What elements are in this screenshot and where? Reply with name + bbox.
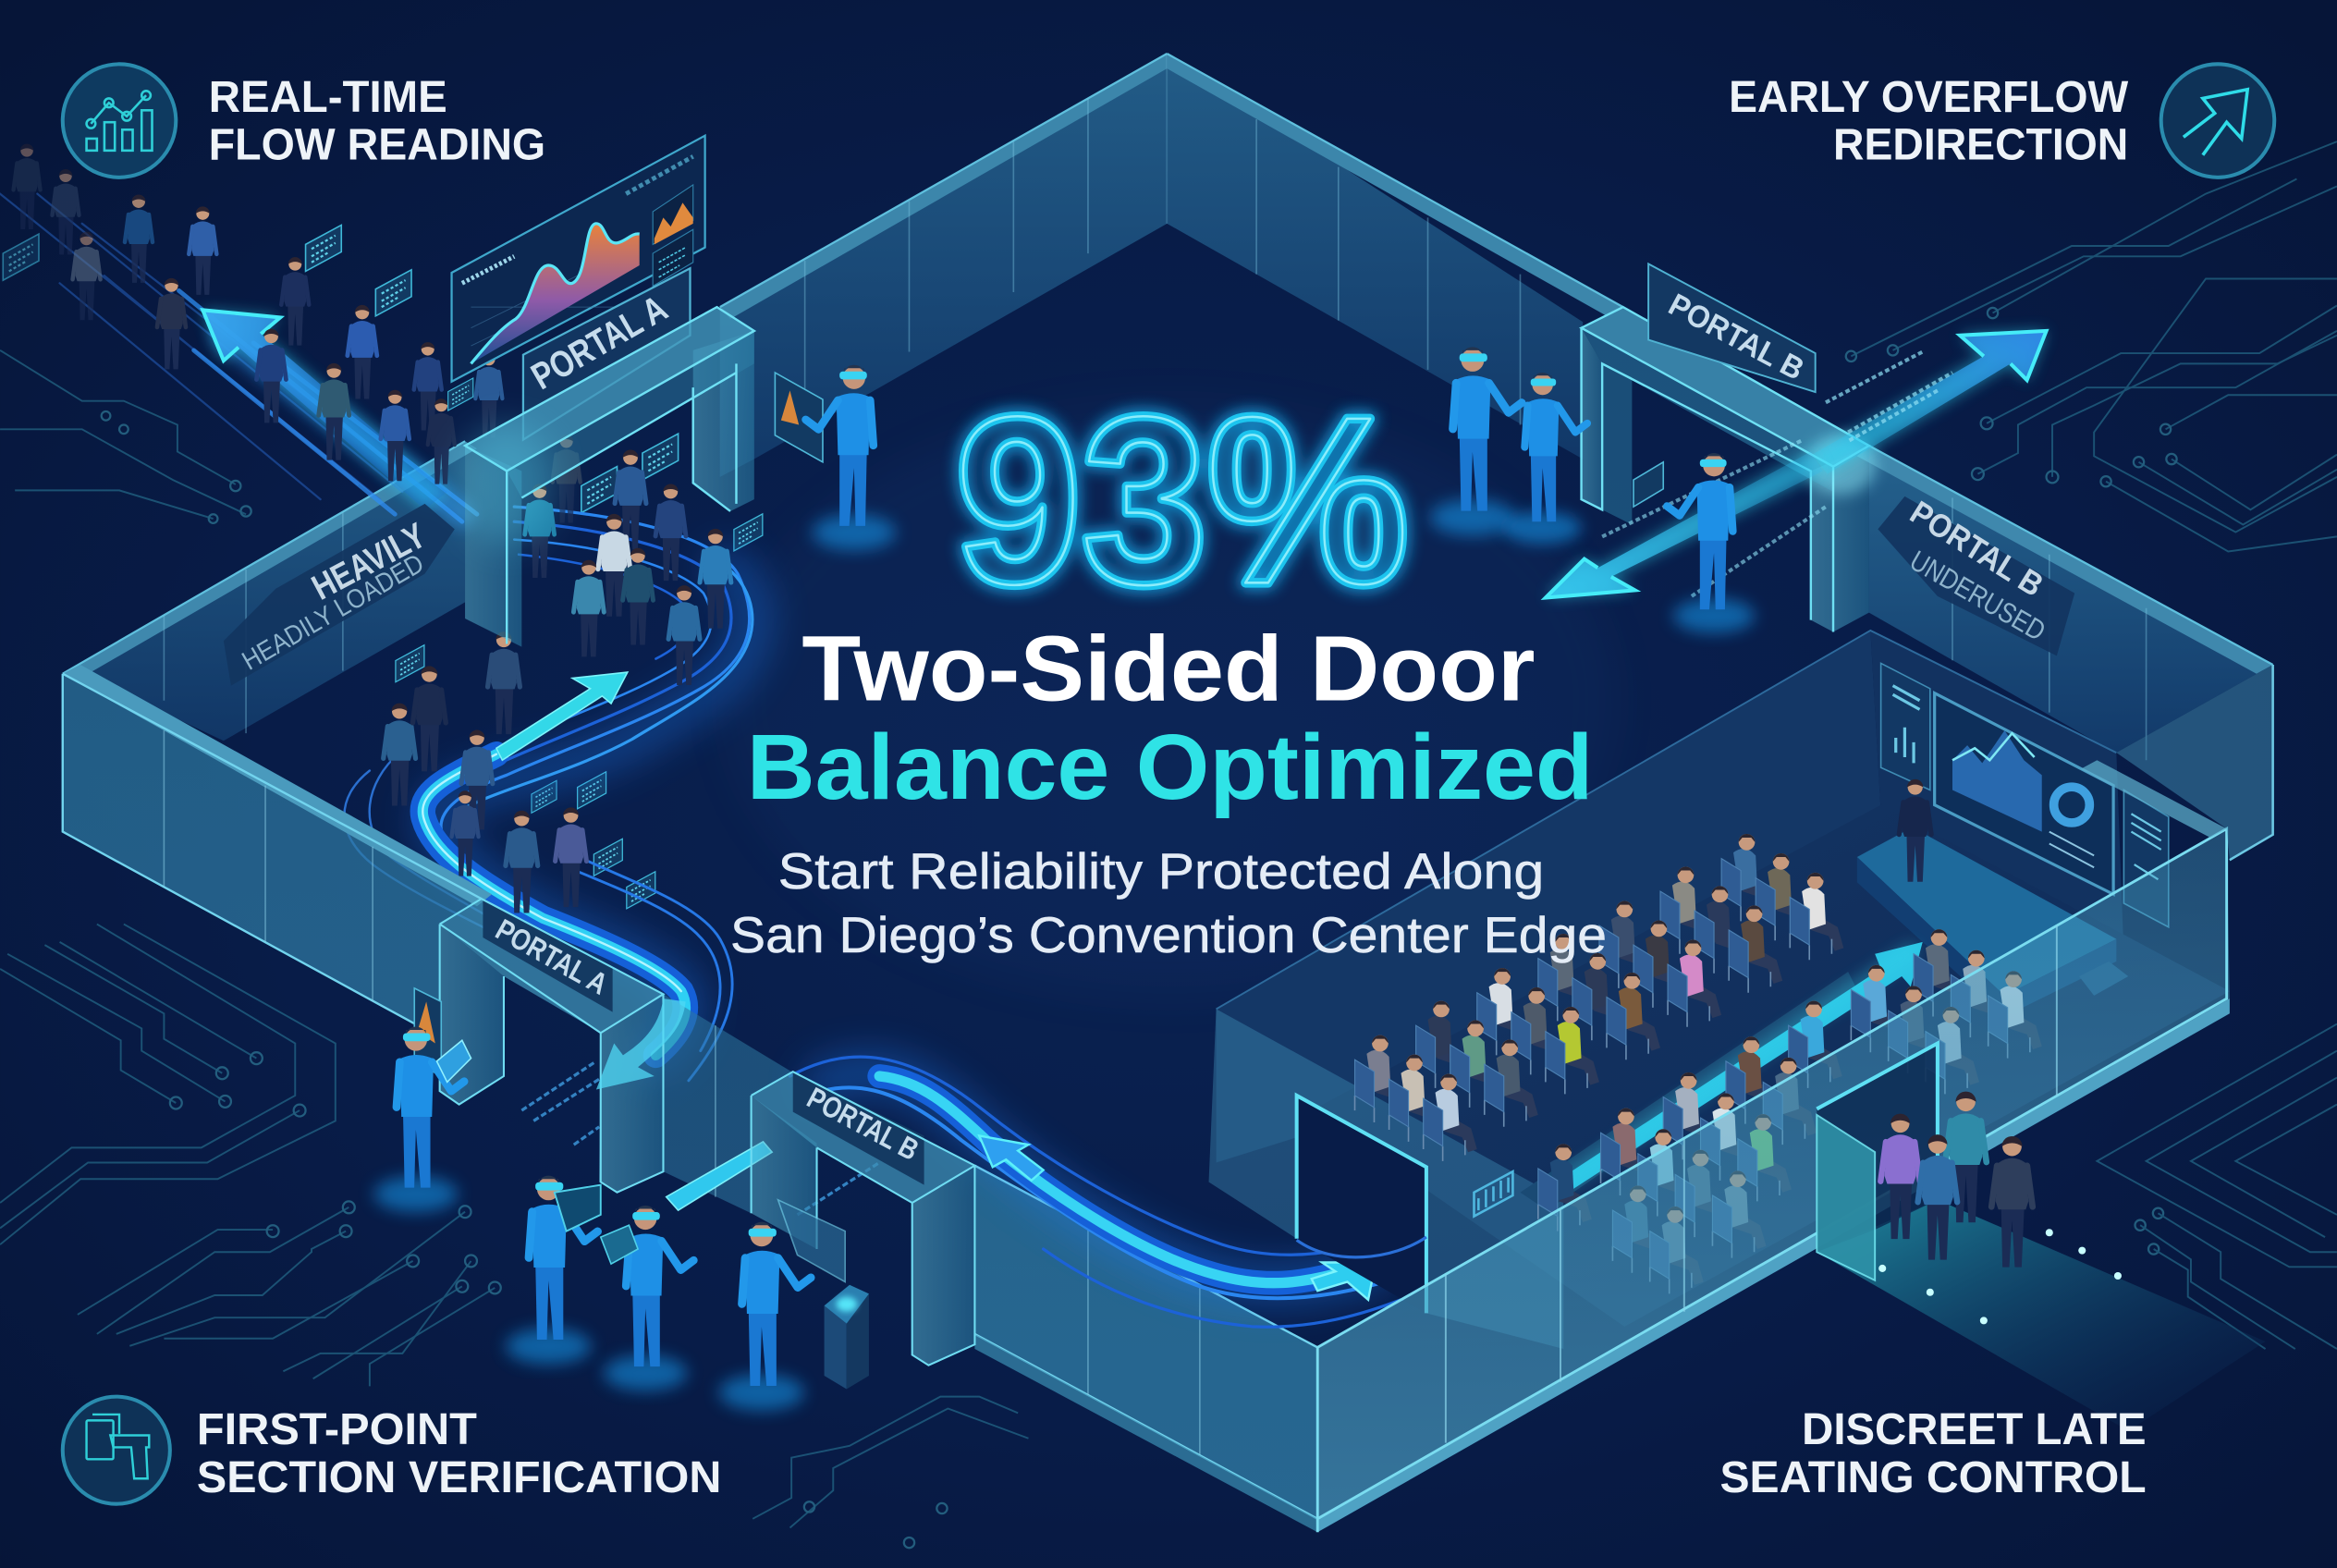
sign: heavily loaded: HEAVILY [306, 516, 433, 608]
headline: balance optimized: Balance Optimized [747, 717, 1593, 819]
arrow: down left [1546, 440, 1826, 597]
arrow: mid swirl [496, 672, 628, 760]
icon: flow chart [63, 64, 176, 178]
late seating door [1817, 1044, 1938, 1280]
lower left wall [63, 665, 1317, 1532]
swirl flow ribbon [344, 507, 752, 1081]
presentation screen [1935, 693, 2113, 894]
portal A upper [459, 307, 754, 647]
arrow bar: lower portals [667, 1142, 772, 1210]
front glass wall [1317, 665, 2273, 1532]
sign: heavily loaded: HEADILY LOADED [238, 548, 429, 677]
dashboard panel [452, 136, 705, 382]
presenter [1899, 779, 1931, 882]
subheading: San Diego’s Convention Center Edge [730, 906, 1607, 963]
crowd: approaching portal A [14, 144, 502, 484]
audience: upper block [1355, 834, 1843, 1161]
stage [1857, 827, 2128, 1016]
arrow: upper right [1812, 331, 2047, 474]
sign: portal B underused: UNDERUSED [1904, 545, 2050, 647]
icon: redirect arrow [2161, 64, 2274, 178]
label: discreet late seating control: DISCREET LATE [1802, 1404, 2147, 1454]
kiosk [825, 1285, 869, 1390]
arrow: top left [202, 310, 447, 509]
subheading: Start Reliability Protected Along [778, 842, 1544, 900]
staff: portal A upper [775, 365, 896, 550]
staff: portal B upper [1430, 347, 1755, 633]
sign: portal A upper: PORTAL A [524, 288, 674, 398]
sign: portal A upper [523, 268, 690, 440]
label: real-time flow reading: REAL-TIME [209, 72, 447, 122]
side displays [1881, 663, 2169, 927]
auditorium doorway [1297, 1096, 1426, 1313]
label: first-point section verification: FIRST-POINT [197, 1404, 477, 1454]
label: real-time flow reading [209, 72, 545, 170]
soft centre glow [723, 402, 1617, 998]
late arrivals group [1880, 1092, 2033, 1268]
crowd through portal A [384, 435, 731, 913]
arrow: through lower portal [596, 998, 686, 1089]
sign: portal B underused: PORTAL B [1903, 494, 2049, 604]
arrow: lower ribbon right [1312, 1263, 1376, 1300]
label: discreet late seating control [1720, 1404, 2147, 1502]
auditorium aisle arrow [1520, 942, 1923, 1210]
lower portal ribbon [790, 1057, 1416, 1327]
wall chart [1474, 1171, 1512, 1217]
portal B upper [1582, 307, 1877, 632]
back wall: upper right [1167, 54, 2273, 760]
label: early overflow redirection: EARLY OVERFLOW [1729, 72, 2129, 122]
data dashes beside lower portal [521, 1061, 879, 1215]
audience: lower block [1538, 929, 2042, 1293]
portal A lower [440, 899, 663, 1193]
portal B lower: PORTAL B [801, 1081, 924, 1167]
flow stripes: top left corridor [0, 194, 477, 521]
main stat 93%: 93% [955, 366, 1409, 633]
sign: portal B underused [1878, 494, 2074, 655]
portal B lower [752, 1072, 974, 1366]
label: discreet late seating control: SEATING CONTROL [1720, 1452, 2147, 1502]
label: early overflow redirection [1729, 72, 2129, 170]
label: early overflow redirection: REDIRECTION [1833, 120, 2128, 170]
staff: lower left [374, 988, 845, 1411]
sign: portal B upper: PORTAL B [1663, 287, 1809, 387]
label: first-point section verification: SECTION VERIFICATION [197, 1452, 721, 1502]
walkway [1817, 1200, 2266, 1431]
icon: scanner [63, 1397, 170, 1504]
headline: two-sided door: Two-Sided Door [801, 619, 1536, 721]
walkway lights [1878, 1229, 2122, 1324]
subheading [730, 842, 1607, 963]
auditorium: walls and floor [1209, 631, 2230, 1349]
arrow: lower ribbon left [979, 1135, 1044, 1181]
main stat 93%: 93% [955, 366, 1409, 633]
label: first-point section verification [197, 1404, 721, 1502]
portal A lower: PORTAL A [490, 913, 613, 1001]
floating data tags [3, 225, 763, 909]
main stat 93%: 93% [955, 366, 1409, 633]
back wall: upper left [63, 54, 1167, 741]
label: real-time flow reading: FLOW READING [209, 120, 545, 170]
